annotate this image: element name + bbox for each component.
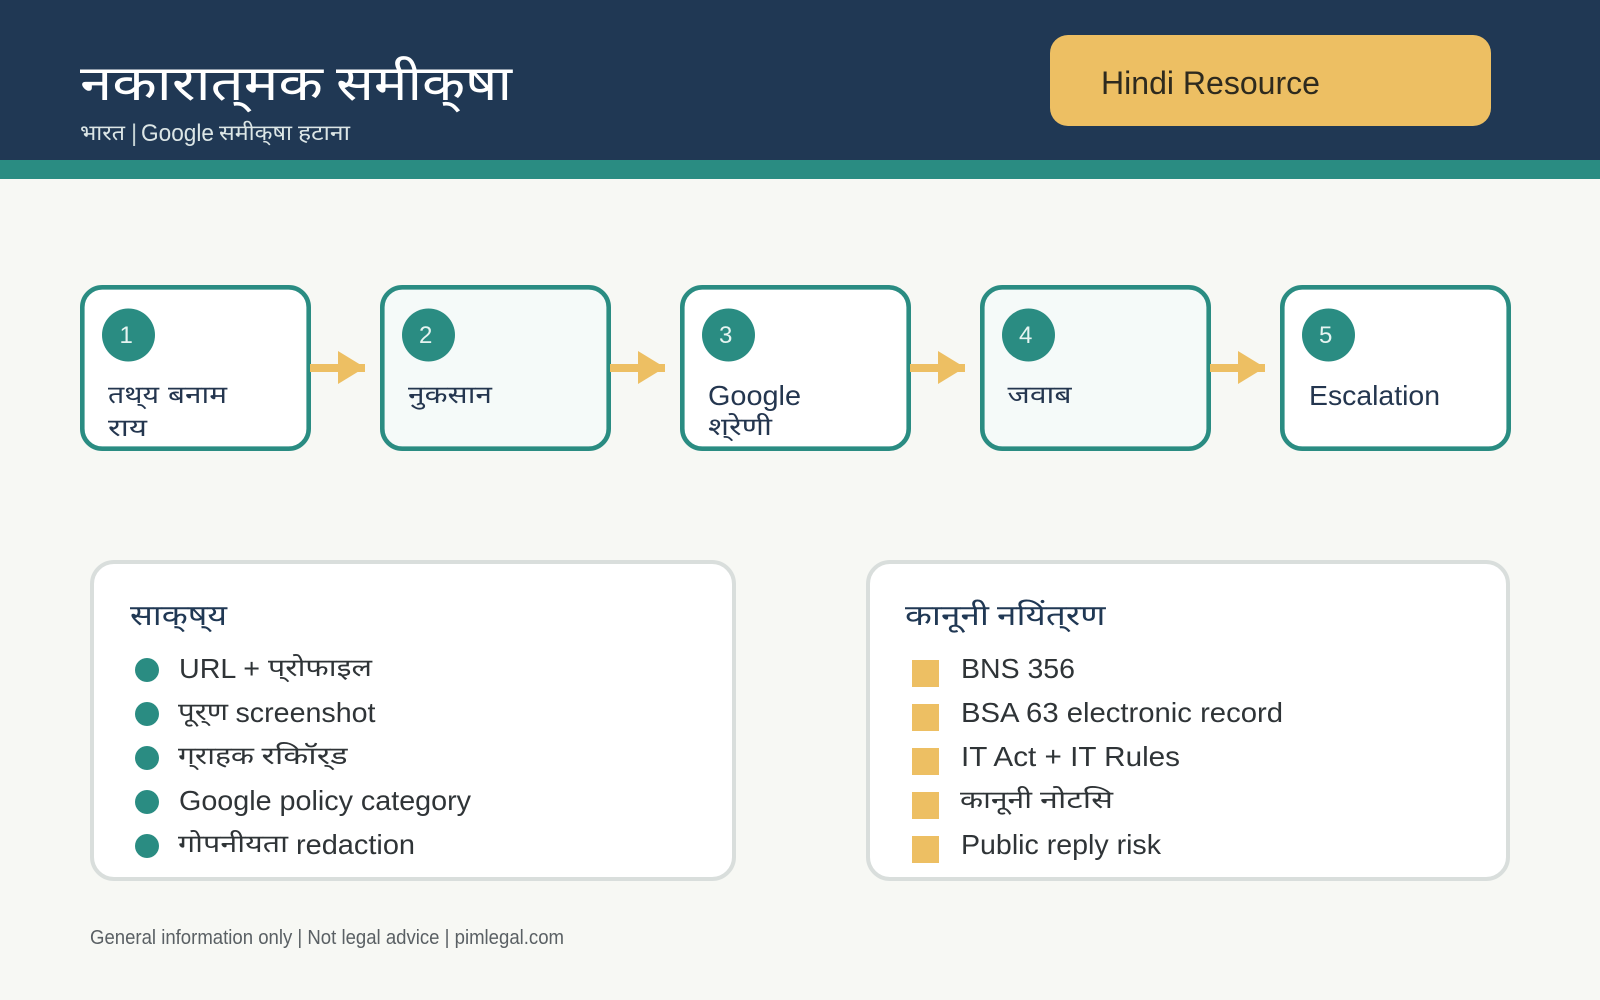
list: legal controls items: Public reply risk — [961, 829, 1162, 860]
list: evidence items — [135, 653, 471, 860]
step 4 card — [982, 287, 1209, 449]
badge: Hindi Resource — [1050, 35, 1491, 126]
footer note: General information only | Not legal advice | pimlegal.com — [90, 927, 564, 949]
list: evidence items: पूर्‌ण — [178, 699, 230, 727]
list: evidence items: Google policy category — [179, 785, 471, 816]
subtitle: समीक्‌षा — [219, 120, 292, 146]
step 4 card: 4 — [1019, 322, 1032, 349]
step 3 card: 3 — [719, 322, 732, 349]
step 3 card: Google — [708, 380, 801, 411]
list: evidence items: URL + — [179, 653, 260, 684]
step 5 card — [1282, 287, 1509, 449]
subtitle: | — [131, 120, 137, 147]
step 4 card: जवाब — [1008, 382, 1073, 409]
step 5 card: 5 — [1319, 322, 1332, 349]
subtitle: Google — [141, 120, 214, 147]
list: legal controls items: कानूनी — [960, 786, 1033, 815]
step 3 card: श्‌रेणी — [708, 413, 773, 442]
step 2 card — [382, 287, 609, 449]
step 1 card: बनाम — [168, 382, 227, 409]
heading: legal controls: नयिंत्‌रण — [997, 599, 1106, 633]
list: evidence items: ग्‌राहक — [178, 743, 255, 771]
arrow 1 to 2 — [310, 351, 365, 384]
step 1 card: राय — [108, 415, 148, 442]
badge: Hindi Resource: Hindi Resource — [1101, 65, 1320, 101]
list: evidence items: रकिॉर्‌ड — [262, 742, 349, 771]
subtitle: हटाना — [298, 121, 350, 145]
list: legal controls items: IT Act + IT Rules — [961, 741, 1180, 772]
step 3 card — [682, 287, 909, 449]
heading: legal controls: कानूनी — [905, 599, 990, 633]
list: legal controls items: BNS 356 — [961, 653, 1075, 684]
panel: evidence — [92, 562, 734, 879]
list: legal controls items — [912, 653, 1283, 863]
list: evidence items: गोपनीयता — [178, 830, 289, 858]
heading: evidence: साक्‌ष्‌य — [130, 600, 228, 633]
title — [80, 56, 513, 113]
list: legal controls items: BSA 63 electronic record — [961, 697, 1283, 728]
title: नकारात्‌मक — [80, 57, 325, 113]
panel: legal controls — [868, 562, 1508, 879]
title: समीक्‌षा — [336, 56, 513, 113]
list: evidence items: प्‌रोफाइल — [268, 654, 372, 683]
list: evidence items: redaction — [296, 829, 415, 860]
step 1 card — [82, 287, 309, 449]
arrow 3 to 4 — [910, 351, 965, 384]
step 2 card: नुकसान — [408, 382, 492, 410]
header band — [0, 0, 1600, 179]
list: evidence items: screenshot — [236, 697, 376, 728]
list: legal controls items: नोटसि — [1040, 786, 1114, 814]
step 5 card: Escalation — [1309, 380, 1440, 411]
arrow 4 to 5 — [1210, 351, 1265, 384]
step 2 card: 2 — [419, 322, 432, 349]
subtitle: भारत — [80, 121, 126, 145]
arrow 2 to 3 — [610, 351, 665, 384]
step 1 card: तथ्‌य — [108, 382, 160, 410]
subtitle — [80, 120, 350, 147]
step 1 card: 1 — [120, 322, 133, 349]
heading: legal controls — [905, 599, 1106, 633]
